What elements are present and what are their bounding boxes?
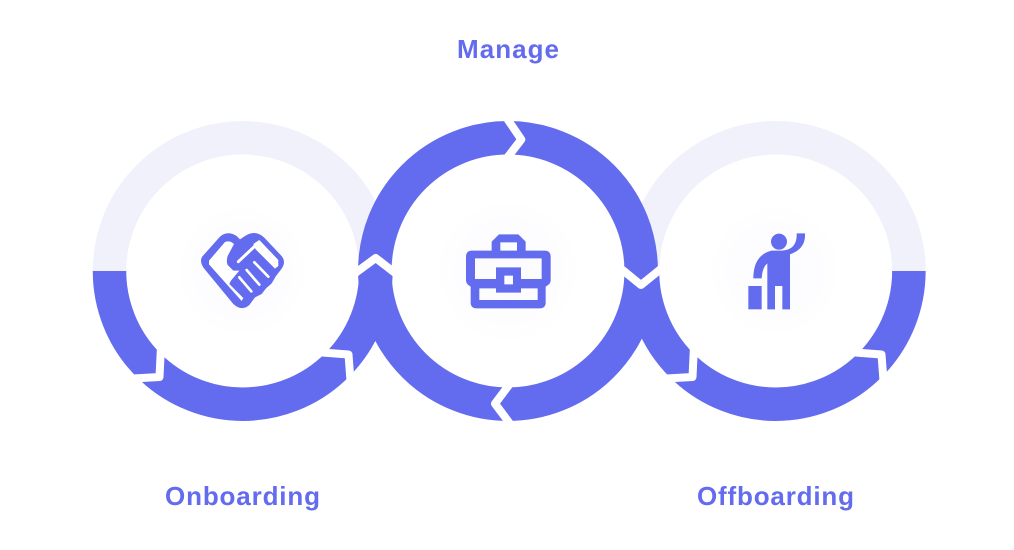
heading: Manage: Manage	[457, 34, 559, 64]
icon: person waving beside suitcase	[748, 233, 805, 309]
separators on onboarding ring	[133, 350, 350, 381]
separators on offboarding ring	[666, 350, 884, 381]
ring: onboarding	[110, 138, 376, 404]
icon: briefcase	[466, 234, 551, 308]
separators on manage ring	[354, 117, 662, 425]
ring: manage	[375, 138, 641, 404]
heading: Offboarding: Offboarding	[697, 481, 854, 511]
icon backdrop glows	[176, 199, 841, 343]
heading: Onboarding: Onboarding	[165, 481, 320, 511]
ring: offboarding	[642, 138, 909, 404]
icon: handshake	[201, 233, 284, 308]
